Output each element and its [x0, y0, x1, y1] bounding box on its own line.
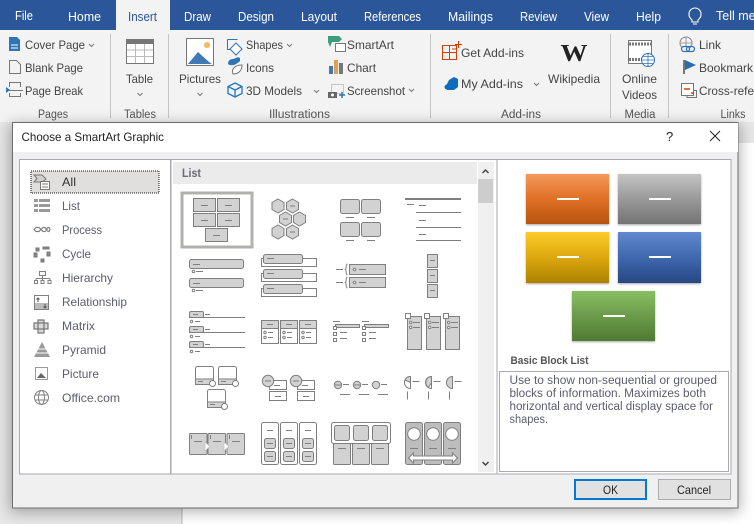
- ribbon tab bar: Insert: [128, 10, 157, 24]
- thumbnail: circle and box list: [262, 375, 314, 400]
- panel: category list: List: [62, 199, 81, 213]
- ribbon group: Tables: Tables: [124, 109, 156, 121]
- ribbon group: Media: Media: [624, 109, 656, 121]
- ribbon tab bar: Mailings: [448, 10, 493, 24]
- dialog title bar: [13, 123, 738, 152]
- preview description: horizontal and vertical display space for: [510, 401, 713, 413]
- ribbon tab bar: Draw: [184, 10, 212, 24]
- icon: All: [34, 175, 50, 190]
- thumbnail: arrow column list: [190, 434, 244, 454]
- panel: gallery: [171, 160, 497, 474]
- gallery heading: List: [182, 166, 201, 180]
- thumbnail: boxed column list: [262, 422, 316, 464]
- ribbon group: Links: Links: [720, 109, 746, 121]
- icon: Hierarchy: [34, 272, 51, 284]
- button: OK: OK: [603, 483, 618, 497]
- ribbon group: Add-ins: W: [560, 41, 588, 67]
- ribbon group: Add-ins: Get Add-ins: [461, 46, 524, 60]
- gallery heading: [173, 162, 477, 184]
- icon: Picture: [36, 368, 48, 380]
- preview description: [500, 372, 728, 472]
- icon: Office.com: [34, 390, 48, 404]
- dialog: Choose a SmartArt Graphic: [12, 122, 738, 508]
- ribbon group: Illustrations: Illustrations: [269, 109, 330, 121]
- panel: category list: Process: [62, 223, 102, 237]
- preview tile: yellow: [526, 232, 609, 284]
- preview tile: green: [572, 291, 655, 342]
- ribbon group: Illustrations: Chart: [347, 61, 377, 75]
- ribbon group: Media: Videos: [622, 88, 657, 102]
- scrollbar: [478, 162, 494, 472]
- thumbnail: picture caption list: [340, 200, 380, 240]
- ribbon tab bar: View: [584, 10, 610, 24]
- ribbon group: Illustrations: Icons: [246, 61, 274, 75]
- thumbnail: header column list: [262, 320, 316, 344]
- ribbon group: Links: Cross-refe: [699, 84, 754, 98]
- thumbnail: Basic Block List (selected): [182, 193, 252, 247]
- thumbnail: circle progress list: [334, 381, 388, 394]
- preview tile: orange: [526, 174, 609, 225]
- thumbnail: checkbox bar list: [333, 322, 388, 342]
- ribbon group: Illustrations: Pictures: [179, 72, 221, 86]
- ribbon group: Pages: [6, 37, 94, 121]
- document background: [0, 122, 754, 524]
- preview description: blocks of information. Maximizes both: [510, 388, 706, 400]
- ribbon group: Pages: Cover Page: [25, 38, 85, 52]
- dialog title bar: Choose a SmartArt Graphic: [22, 130, 164, 144]
- panel: category list: [20, 160, 170, 474]
- ribbon group: Pages: Page Break: [25, 84, 84, 98]
- ribbon tab bar: References: [364, 10, 421, 24]
- ribbon group: Illustrations: Screenshot: [347, 84, 406, 98]
- ribbon group: Add-ins: Add-ins: [501, 109, 541, 121]
- ribbon body: [0, 30, 754, 122]
- ribbon tab bar: Layout: [301, 10, 338, 24]
- thumbnail: hexagon list: [272, 199, 306, 239]
- panel: category list: Hierarchy: [62, 271, 113, 285]
- preview tile: blue: [618, 232, 701, 284]
- thumbnail: vertical bullet list: [190, 260, 244, 292]
- thumbnail: caption picture cards: [196, 366, 238, 410]
- thumbnail: tall column list: [406, 314, 460, 350]
- icon: Matrix: [34, 320, 48, 333]
- panel: category list: Relationship: [62, 295, 127, 309]
- ribbon tab bar: Home: [68, 10, 101, 24]
- preview description: shapes.: [510, 414, 548, 426]
- icon: List: [34, 199, 50, 212]
- ribbon group: Media: [622, 40, 657, 121]
- thumbnail: framed picture columns: [332, 422, 390, 464]
- button: OK: [575, 480, 646, 499]
- ribbon group: Pages: Blank Page: [25, 61, 83, 75]
- panel: category list: All: [62, 175, 76, 189]
- thumbnail: half-circle list: [405, 376, 462, 400]
- ribbon group: Illustrations: Shapes: [246, 38, 283, 52]
- button: Cancel: [658, 480, 730, 500]
- thumbnail: bracket list: [336, 264, 386, 288]
- icon: Cycle: [34, 247, 50, 262]
- preview description: Use to show non-sequential or grouped: [510, 375, 717, 387]
- ribbon group: Tables: [124, 39, 156, 121]
- panel: category list: Matrix: [62, 319, 95, 333]
- panel: category list: Cycle: [62, 247, 91, 261]
- thumbnail: vertical bullet lines: [405, 198, 461, 240]
- icon: Relationship: [34, 296, 48, 310]
- preview tile: gray: [618, 174, 701, 225]
- ribbon group: Add-ins: My Add-ins: [461, 77, 523, 91]
- thumbnail: stacked lined list: [189, 312, 245, 353]
- ribbon tab bar: Help: [636, 10, 661, 24]
- preview title: Basic Block List: [510, 355, 589, 367]
- selected category highlight: [31, 171, 159, 193]
- panel: category list: Office.com: [62, 391, 120, 405]
- ribbon group: Tables: Table: [126, 72, 153, 86]
- ribbon group: Links: Bookmark: [699, 61, 754, 75]
- ribbon group: Illustrations: SmartArt: [347, 38, 395, 52]
- ribbon tab bar: Design: [238, 10, 274, 24]
- ribbon tab bar: File: [15, 9, 33, 23]
- ribbon group: Pages: Pages: [38, 109, 68, 121]
- ribbon tab bar: [0, 0, 754, 30]
- dialog title bar: ?: [666, 129, 673, 144]
- panel: category list: Pyramid: [62, 343, 106, 357]
- ribbon group: Illustrations: [179, 36, 414, 121]
- panel: preview: [497, 160, 731, 474]
- dialog shadow: [10, 124, 740, 512]
- ribbon group: Links: [680, 37, 754, 121]
- ribbon group: Add-ins: [442, 41, 600, 121]
- button: Cancel: Cancel: [677, 483, 711, 497]
- ribbon tab bar: Review: [520, 10, 558, 24]
- ribbon group: Links: Link: [699, 38, 722, 52]
- ribbon group: Illustrations: 3D Models: [246, 84, 302, 98]
- thumbnail: vertical box stack: [428, 254, 438, 298]
- ribbon group: Add-ins: Wikipedia: [548, 72, 600, 86]
- thumbnail: circle columns with double arrow: [406, 422, 460, 464]
- icon: Process: [34, 228, 50, 232]
- thumbnail: tabbed list: [262, 254, 316, 296]
- icon: Pyramid: [34, 342, 50, 357]
- panel: category list: Picture: [62, 367, 99, 381]
- ribbon group: Media: Online: [622, 72, 657, 86]
